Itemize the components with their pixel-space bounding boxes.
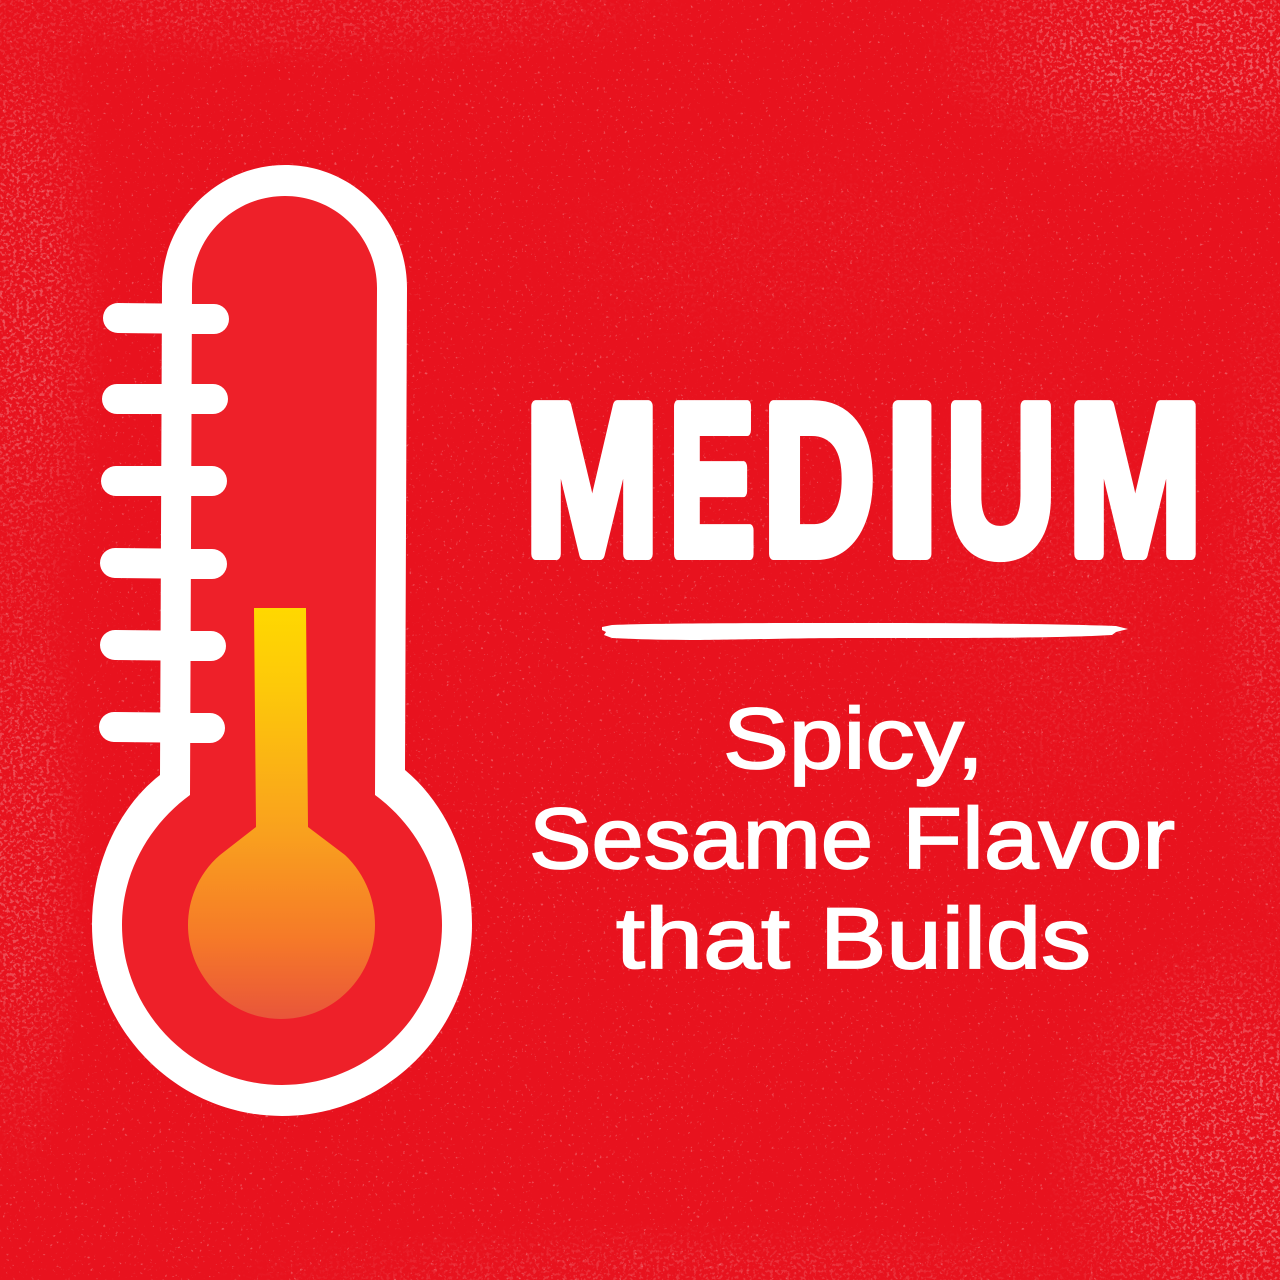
thermometer outer white outline xyxy=(92,165,472,1116)
line: Sesame Flavor: Flavor xyxy=(902,791,1175,887)
heading: MEDIUM: I xyxy=(885,359,939,600)
heading: MEDIUM: U xyxy=(946,359,1056,600)
tick marks xyxy=(114,318,214,728)
divider: brush stroke xyxy=(602,623,1128,640)
line: Sesame Flavor: Sesame xyxy=(529,791,873,887)
description text xyxy=(529,691,1175,987)
heading: MEDIUM: E xyxy=(669,359,755,600)
heading: MEDIUM: D xyxy=(763,359,875,600)
heading: MEDIUM: M xyxy=(1068,359,1202,600)
thermometer inner red body xyxy=(122,196,442,1085)
icon: thermometer xyxy=(92,165,472,1116)
heading: MEDIUM: M xyxy=(525,359,659,600)
line: that Builds: Builds xyxy=(820,891,1091,987)
tick overlap into the body xyxy=(185,319,214,728)
mercury level gradient xyxy=(188,608,375,1019)
line: that Builds: that xyxy=(616,891,790,987)
line: Spicy,: Spicy, xyxy=(723,691,984,787)
